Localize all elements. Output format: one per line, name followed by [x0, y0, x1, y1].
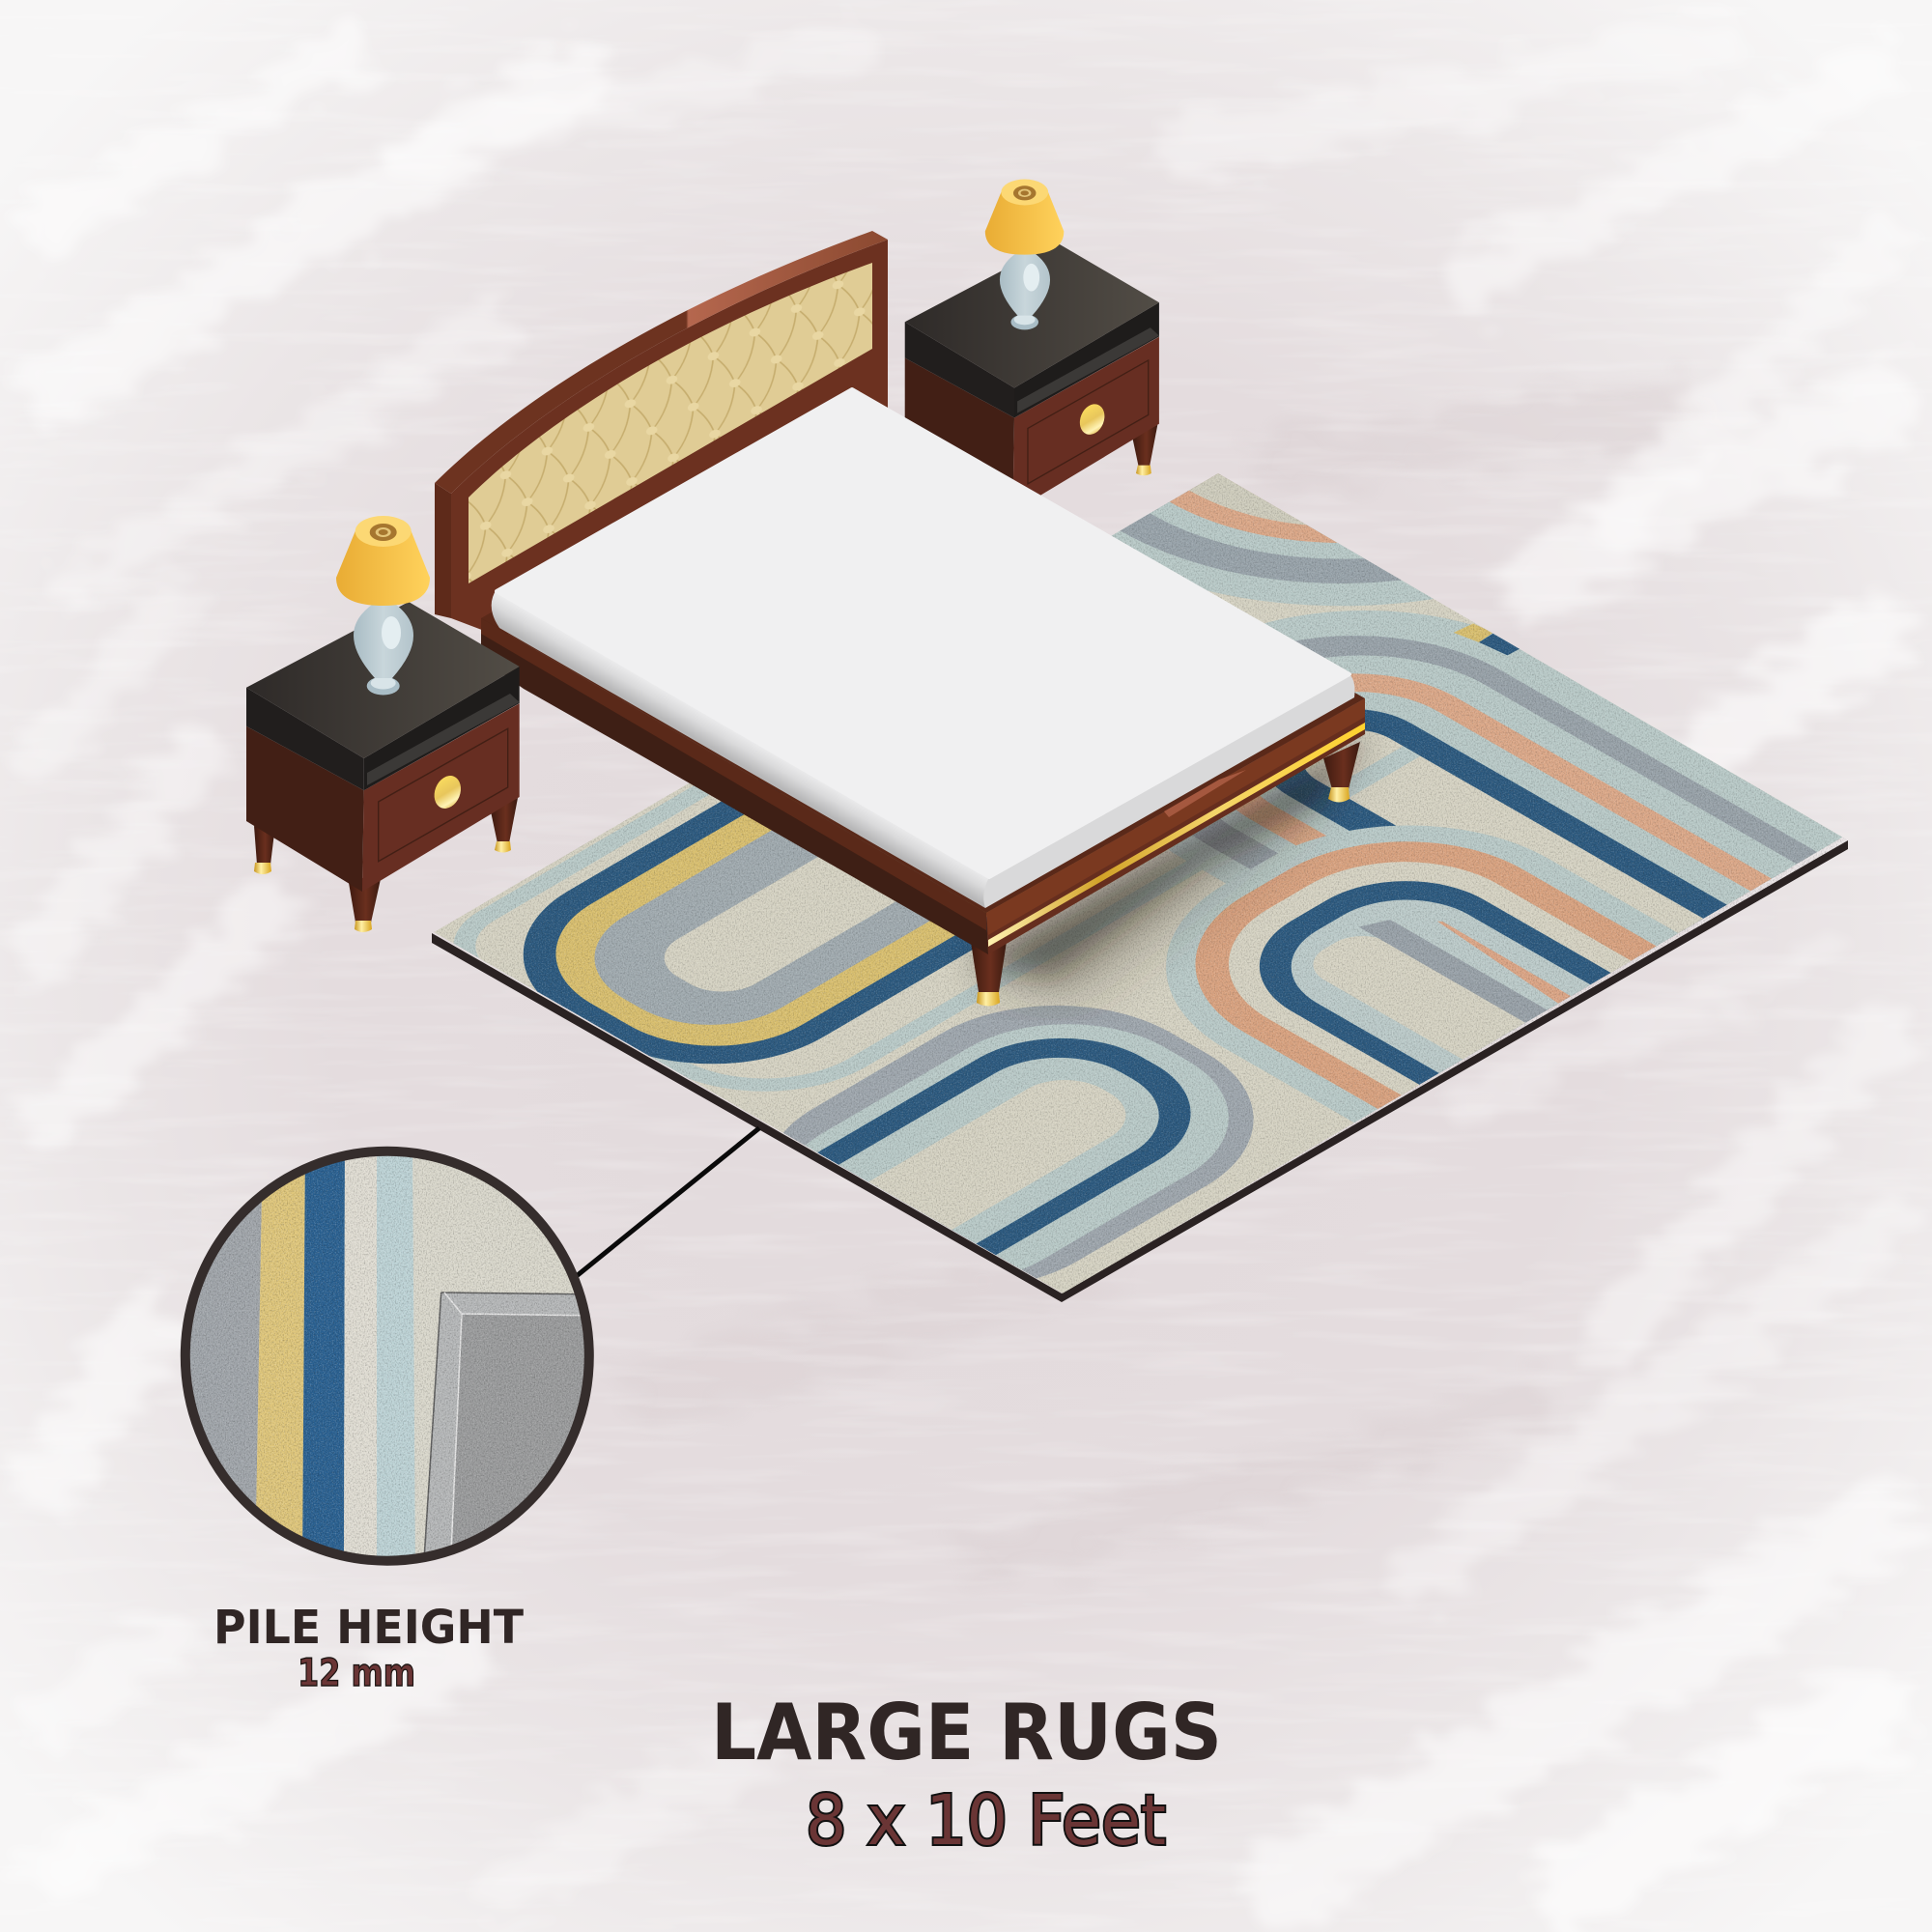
rug edge pieces: yellow and blue — [1454, 624, 1521, 655]
label: pile height: PILE HEIGHT — [213, 1601, 524, 1655]
rug edge thickness — [432, 840, 1848, 1302]
right lamp — [985, 180, 1064, 329]
bed shadow on rug — [966, 734, 1372, 995]
lower arch: grey and blue — [782, 1006, 1254, 1279]
bed leg front — [971, 942, 1007, 1007]
left arch: blue yellow grey — [454, 781, 1202, 1092]
bed — [435, 231, 1365, 1007]
bed rails — [481, 406, 1365, 954]
leader line — [574, 1128, 759, 1278]
bed leg right — [1323, 742, 1360, 802]
right arch: peach and blue — [1166, 825, 1678, 1122]
title: LARGE RUGS — [711, 1688, 1222, 1777]
left lamp — [336, 516, 430, 696]
inset: pile detail circle — [174, 1140, 599, 1575]
mattress — [492, 389, 1354, 908]
headboard — [435, 231, 888, 638]
rug with arch pattern — [435, 473, 1847, 1293]
headboard tufted panel — [464, 256, 879, 589]
left nightstand — [246, 602, 520, 932]
top corner arcs — [1111, 473, 1434, 607]
right nightstand — [905, 242, 1159, 550]
label: 12 mm: 12 mm — [298, 1652, 415, 1695]
upper long arch stripes — [1168, 611, 1843, 1003]
subtitle: size: 8 x 10 Feet — [806, 1780, 1166, 1861]
